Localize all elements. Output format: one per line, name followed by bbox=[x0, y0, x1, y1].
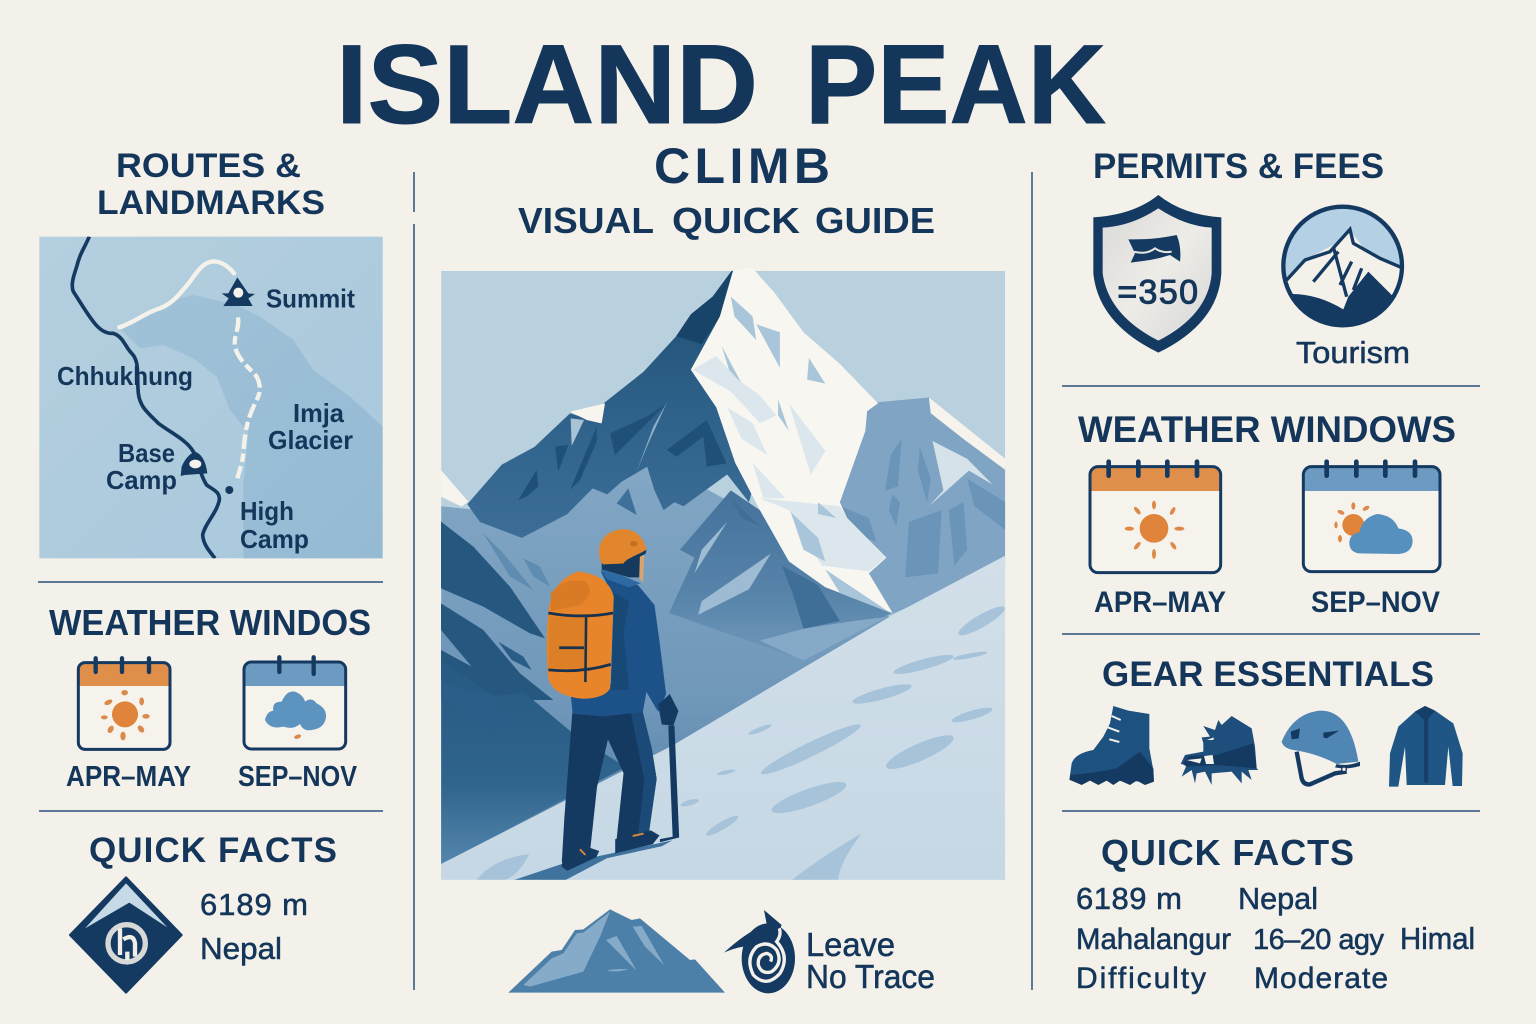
map: labels: Glacier bbox=[268, 425, 353, 455]
calendar: april to may sun bbox=[78, 658, 170, 749]
footprints in snow bbox=[476, 602, 1007, 880]
icon: jacket bbox=[1389, 706, 1463, 787]
climber bbox=[511, 529, 679, 881]
calendar: september to november cloud bbox=[244, 657, 346, 749]
map: labels bbox=[57, 283, 355, 554]
text: facts grid: 6189 m bbox=[1076, 881, 1182, 916]
haze and mid range base bbox=[441, 463, 894, 864]
icon: fee shield bbox=[1093, 195, 1221, 353]
text: facts grid: Himal bbox=[1400, 921, 1475, 956]
map: high camp dot bbox=[225, 486, 233, 494]
label: tourism: Tourism bbox=[1296, 335, 1410, 370]
labels: left calendars: SEP–NOV bbox=[238, 761, 358, 793]
route map bbox=[39, 237, 383, 558]
map: labels: Imja bbox=[293, 398, 345, 428]
icons: right calendars bbox=[1090, 462, 1440, 573]
title bbox=[336, 22, 1106, 147]
panel: permits and fees bbox=[1093, 147, 1413, 370]
mountain detail left side bbox=[441, 402, 727, 700]
map: river bbox=[72, 237, 219, 558]
map: labels: High bbox=[240, 496, 294, 526]
snow slope bbox=[441, 556, 1005, 880]
heading: quick facts: QUICK FACTS bbox=[1101, 832, 1354, 873]
panel: left weather windows bbox=[49, 602, 371, 793]
glove bbox=[658, 694, 678, 726]
map: labels: Chhukhung bbox=[57, 361, 193, 391]
text: height and country: Nepal bbox=[200, 931, 282, 966]
climber shadow bbox=[511, 840, 673, 881]
helmet bbox=[599, 529, 646, 564]
icon: boot bbox=[1069, 706, 1154, 785]
text: facts grid: Moderate bbox=[1254, 962, 1388, 995]
heading: routes and landmarks bbox=[97, 147, 325, 222]
text: facts grid bbox=[1076, 881, 1475, 995]
text: leave no trace bbox=[806, 926, 935, 995]
map: labels: Camp bbox=[240, 524, 309, 554]
map: white ridge route bbox=[119, 261, 234, 327]
heading: routes and landmarks: ROUTES & bbox=[116, 147, 301, 185]
pants bbox=[562, 708, 657, 862]
right background peak bbox=[840, 398, 1006, 616]
snow face of main mountain bbox=[691, 268, 893, 613]
labels: right calendars: APR–MAY bbox=[1094, 586, 1226, 619]
heading: routes and landmarks: LANDMARKS bbox=[97, 184, 325, 222]
icons: left calendars bbox=[78, 657, 346, 749]
panel: gear essentials bbox=[1069, 655, 1463, 787]
heading: weather windos: WEATHER WINDOS bbox=[49, 602, 371, 643]
text: facts grid: 16–20 agy bbox=[1253, 924, 1384, 956]
map: labels: Summit bbox=[266, 283, 355, 313]
jacket bbox=[571, 571, 666, 717]
text: height and country: 6189 m bbox=[200, 887, 308, 922]
map: labels: Camp bbox=[106, 465, 177, 495]
text: facts grid: Mahalangur bbox=[1076, 923, 1231, 956]
map: summit marker bbox=[222, 277, 255, 306]
labels: right calendars bbox=[1094, 586, 1440, 619]
backdrop mountains bbox=[441, 268, 1005, 880]
subheading: visual quick guide: GUIDE bbox=[815, 200, 935, 241]
lower right ridge of main mountain bbox=[669, 490, 891, 660]
panel: left quick facts bbox=[70, 831, 337, 993]
map: Imja glacier area bbox=[122, 295, 383, 558]
backpack bbox=[547, 571, 614, 699]
text: leave no trace: Leave bbox=[806, 926, 895, 963]
lower ridge, snow face, slope and climber bbox=[441, 268, 1007, 881]
icon: fee shield: =350 bbox=[1117, 273, 1198, 311]
head bbox=[602, 554, 641, 577]
title: PEAK bbox=[805, 22, 1106, 147]
calendar: april to may sun bbox=[1090, 462, 1221, 573]
icon: crampon bbox=[1181, 716, 1258, 785]
icons: gear row bbox=[1069, 706, 1463, 787]
heading: permits and fees: PERMITS & FEES bbox=[1093, 147, 1384, 186]
panel: right weather windows bbox=[1078, 409, 1456, 619]
panel: routes and landmarks bbox=[39, 147, 383, 558]
icon: small mountain bbox=[508, 909, 725, 993]
heading: climb: CLIMB bbox=[654, 138, 830, 194]
icon: diamond mountain badge bbox=[70, 877, 182, 993]
text: facts grid: Difficulty bbox=[1076, 962, 1206, 995]
panel: centre heading bbox=[518, 138, 935, 241]
illustration: climber and mountain bbox=[441, 268, 1007, 881]
icon: leave no trace spiral bbox=[724, 910, 795, 993]
subheading: visual quick guide bbox=[518, 200, 935, 241]
labels: left calendars bbox=[66, 761, 358, 793]
icons: permit badges bbox=[1093, 195, 1413, 353]
map: labels: Base bbox=[118, 438, 175, 468]
pole bbox=[660, 726, 679, 842]
icon: helmet bbox=[1282, 711, 1360, 784]
text: height and country bbox=[200, 887, 308, 966]
main mountain dark face upper bbox=[467, 268, 760, 538]
map: base camp marker bbox=[181, 452, 207, 476]
text: leave no trace: No Trace bbox=[806, 958, 935, 995]
labels: right calendars: SEP–NOV bbox=[1311, 586, 1440, 619]
heading: quick facts: QUICK FACTS bbox=[89, 831, 337, 870]
panel: right quick facts bbox=[1076, 832, 1475, 995]
boots bbox=[562, 830, 660, 871]
icon: tourism circle bbox=[1280, 207, 1413, 330]
calendar: september to november cloud bbox=[1303, 462, 1440, 572]
map: dashed summit route bbox=[235, 317, 260, 478]
left foreground lower bbox=[441, 680, 622, 864]
labels: left calendars: APR–MAY bbox=[66, 761, 191, 793]
heading: gear essentials: GEAR ESSENTIALS bbox=[1102, 655, 1434, 694]
subheading: visual quick guide: VISUAL bbox=[518, 200, 654, 241]
subheading: visual quick guide: QUICK bbox=[672, 200, 800, 241]
heading: weather windows: WEATHER WINDOWS bbox=[1078, 409, 1456, 450]
text: facts grid: Nepal bbox=[1238, 881, 1318, 916]
title: ISLAND bbox=[336, 22, 758, 147]
